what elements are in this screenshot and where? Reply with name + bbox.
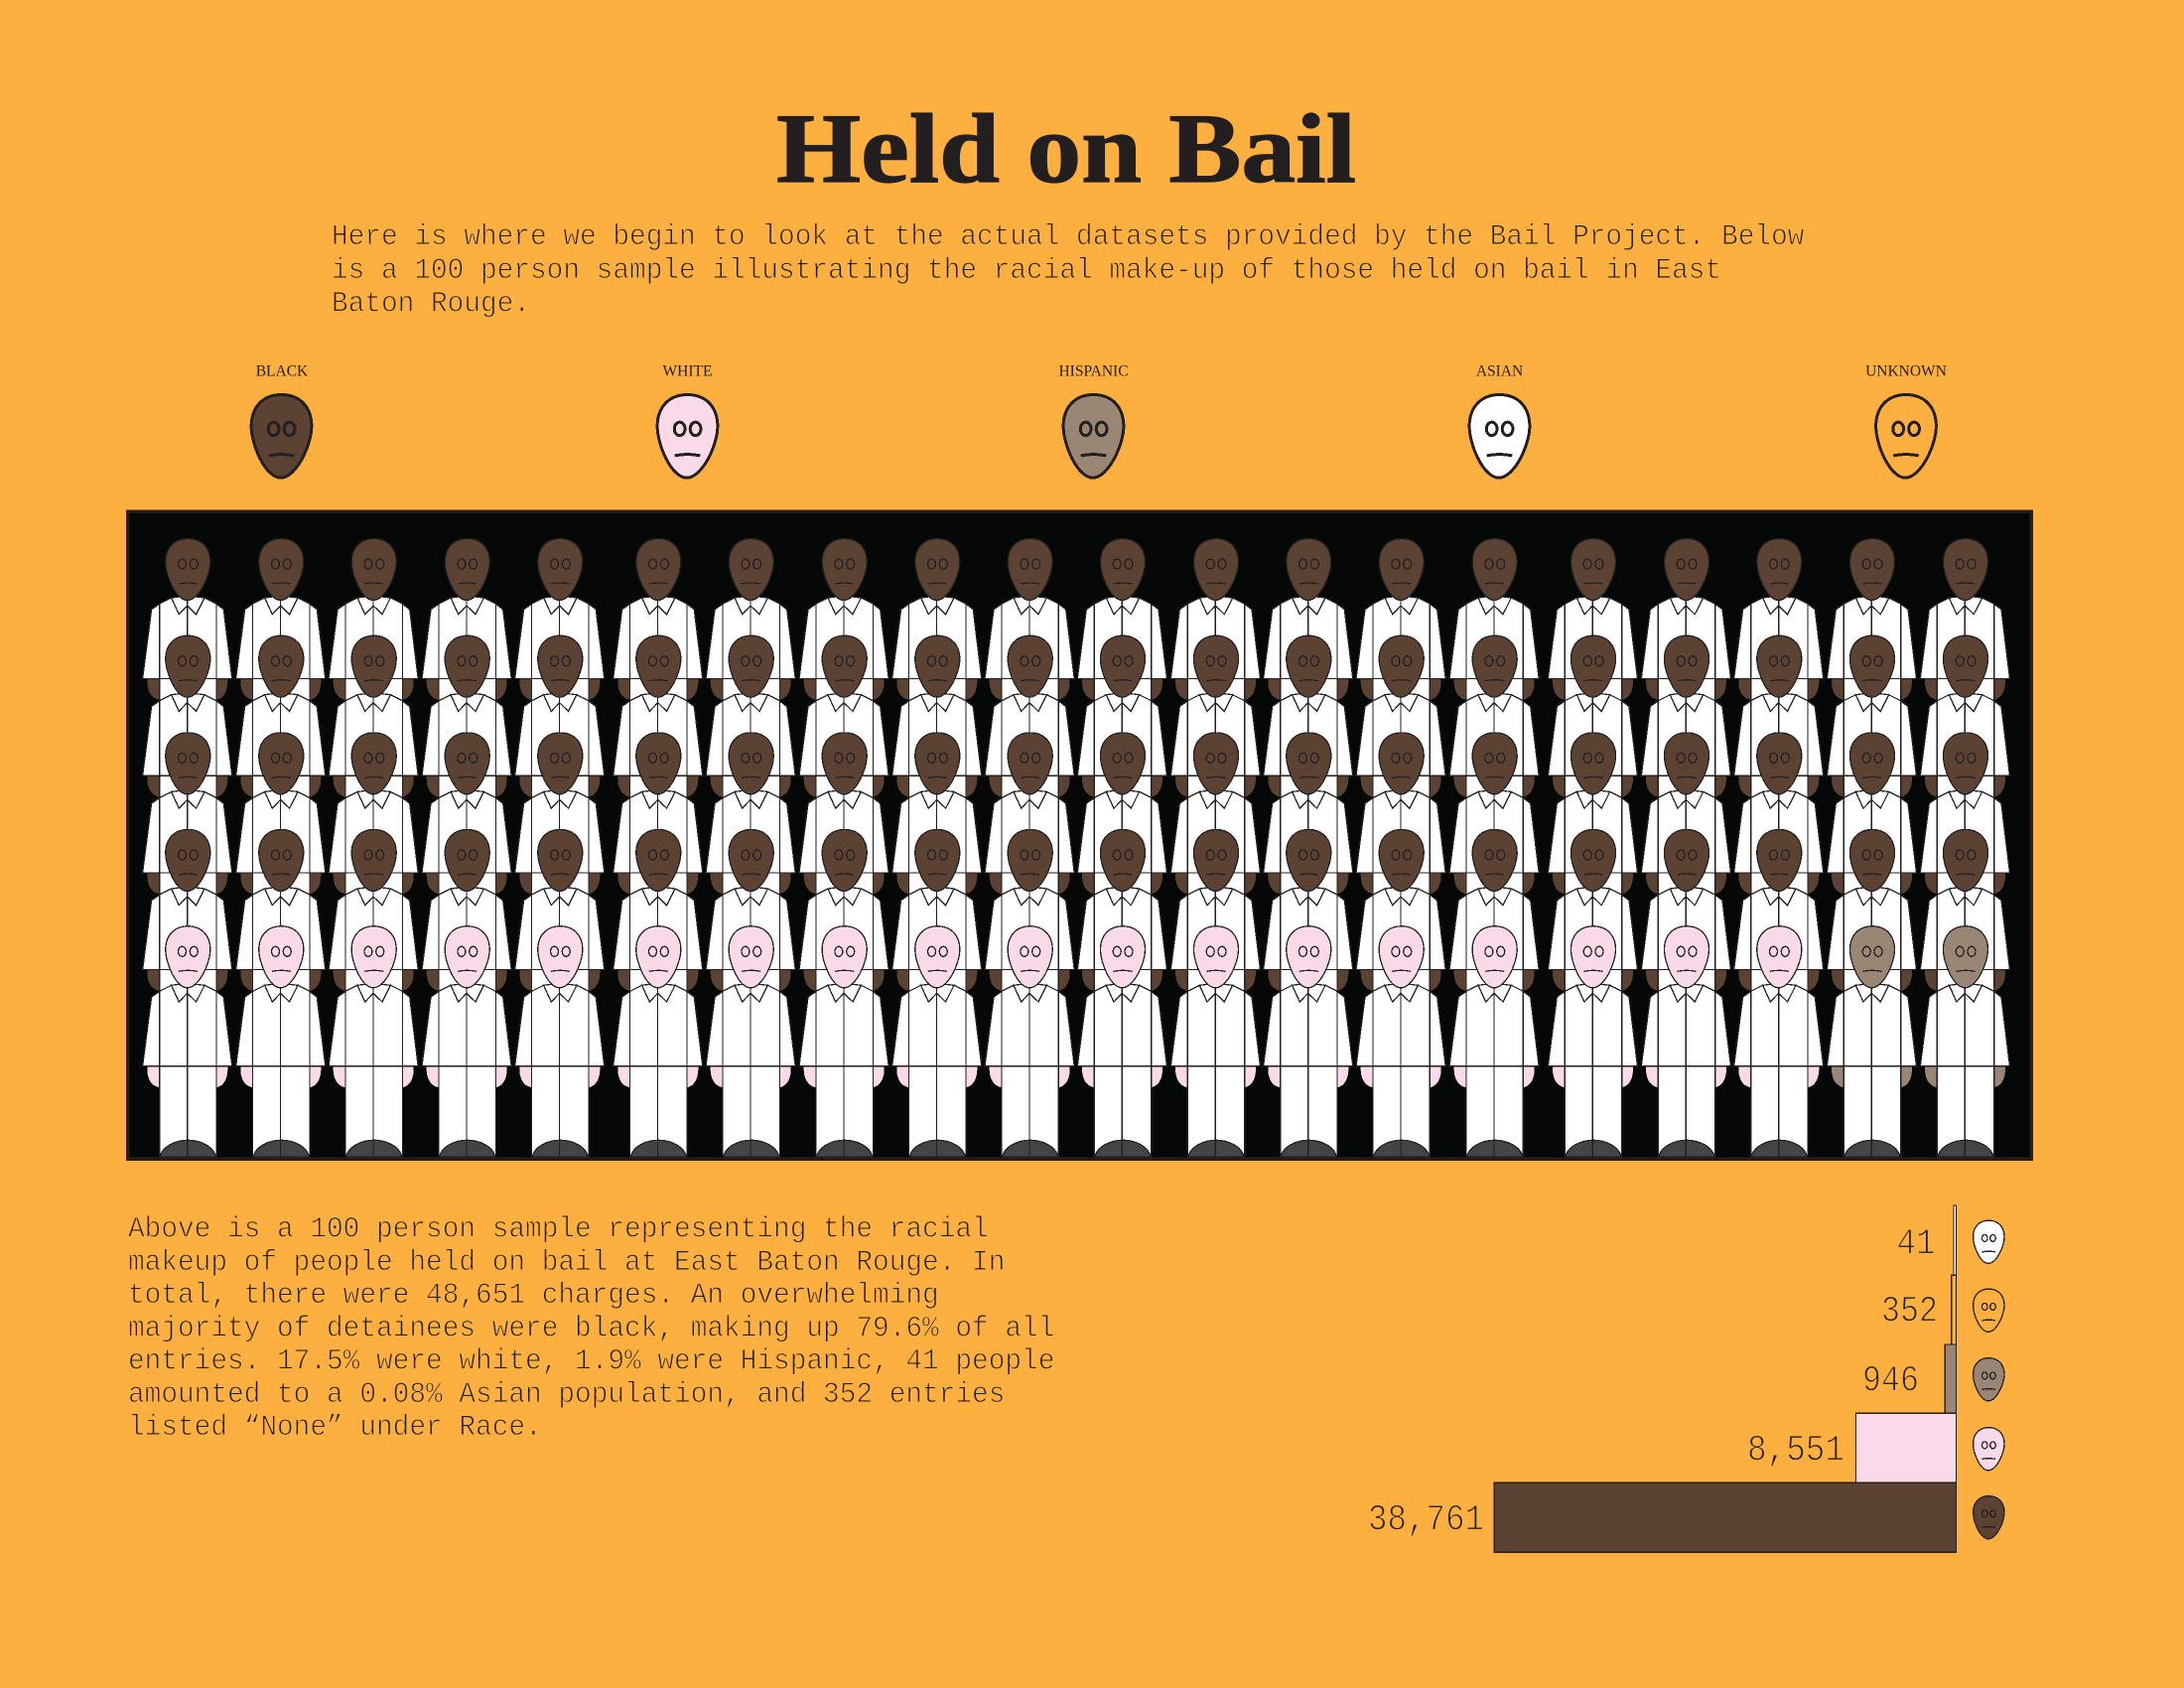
row 4 of figures <box>142 830 2010 1060</box>
bar: unknown 352: 352 <box>1881 1292 1938 1334</box>
description text: Above is a 100 person sample representing the racial <box>128 1212 989 1246</box>
intro text: Baton Rouge. <box>332 287 530 321</box>
bar chart <box>1368 1205 2004 1552</box>
bar: unknown 352 <box>1881 1275 2004 1344</box>
description text: makeup of people held on bail at East Baton Rouge. In <box>128 1245 1005 1279</box>
legend item: asian <box>1469 363 1530 478</box>
intro text: is a 100 person sample illustrating the racial make-up of those held on bail in East <box>332 253 1721 287</box>
row 2 of figures <box>142 635 2010 867</box>
bar: hispanic 946 <box>1862 1344 2004 1413</box>
row 3 of figures <box>142 733 2010 963</box>
intro text: Here is where we begin to look at the actual datasets provided by the Bail Project. Below <box>332 219 1805 253</box>
legend item: white: WHITE <box>663 363 712 379</box>
bar: black 38,761 <box>1368 1482 2004 1552</box>
description text: amounted to a 0.08% Asian population, and 352 entries <box>128 1377 1005 1411</box>
panel: 100 person sample <box>128 511 2031 1159</box>
legend item: white <box>657 363 718 478</box>
legend item: hispanic <box>1058 363 1129 478</box>
legend item: black <box>251 363 312 478</box>
description text: total, there were 48,651 charges. An overwhelming <box>128 1278 939 1313</box>
legend item: hispanic: HISPANIC <box>1058 363 1129 379</box>
description text: entries. 17.5% were white, 1.9% were Hispanic, 41 people <box>128 1344 1054 1378</box>
row 5 of figures <box>142 926 2010 1157</box>
row 1 of figures <box>142 538 2010 770</box>
legend item: unknown <box>1865 363 1947 478</box>
legend item: black: BLACK <box>256 363 309 379</box>
description text: listed “None” under Race. <box>128 1410 542 1444</box>
bar: white 8,551: 8,551 <box>1747 1431 1844 1473</box>
bar: white 8,551 <box>1747 1413 2004 1482</box>
bar: black 38,761: 38,761 <box>1368 1500 1484 1542</box>
bar: asian 41: 41 <box>1896 1224 1936 1266</box>
intro text <box>332 219 1805 321</box>
legend <box>251 363 1947 478</box>
legend item: asian: ASIAN <box>1476 363 1523 379</box>
description text: majority of detainees were black, making up 79.6% of all <box>128 1311 1054 1345</box>
bar: hispanic 946: 946 <box>1862 1361 1919 1403</box>
title: Held on Bail <box>776 93 1356 204</box>
legend item: unknown: UNKNOWN <box>1865 363 1947 379</box>
description text <box>128 1212 1054 1444</box>
bar: asian 41 <box>1896 1205 2004 1275</box>
